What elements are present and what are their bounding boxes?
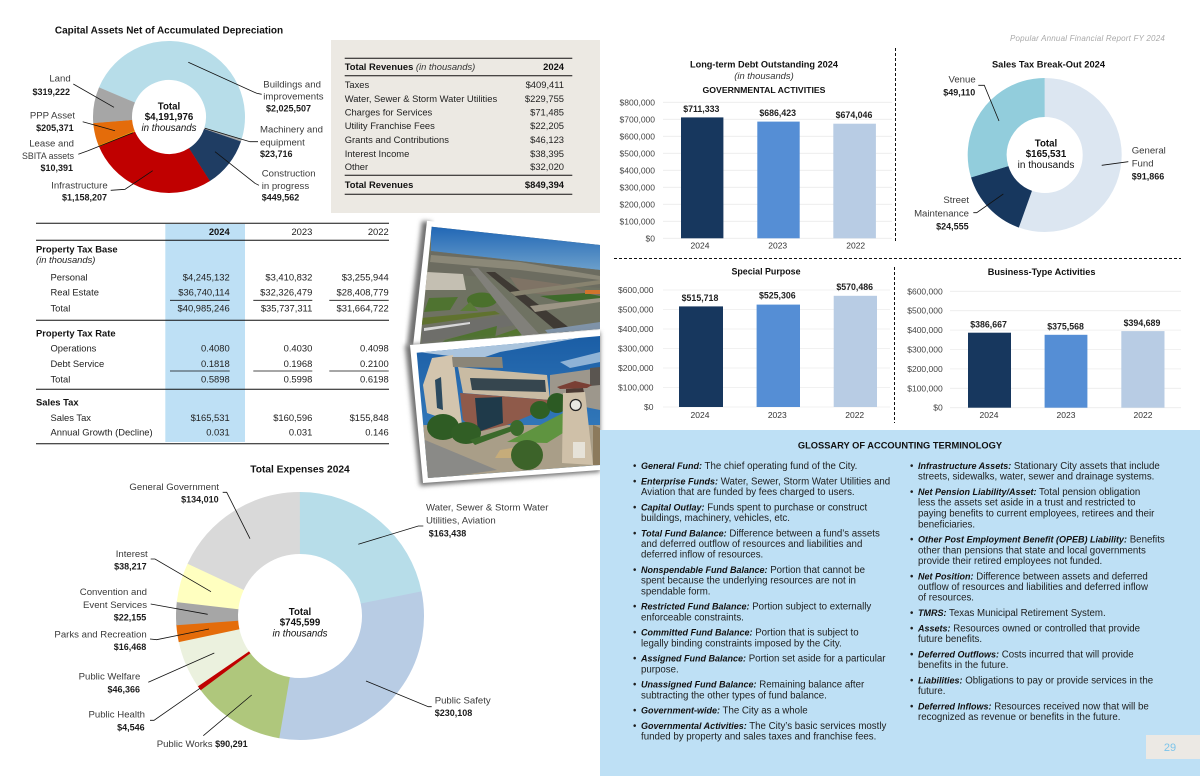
segment labels: $2,025,507	[266, 104, 311, 114]
panel: total revenues table	[331, 40, 600, 213]
bar chart: long-term debt governmental activities: $711,333	[683, 104, 720, 114]
glossary right column: benefits in the future.	[918, 660, 1008, 671]
segment labels: Construction	[262, 168, 316, 179]
bar chart: long-term debt governmental activities: 2024	[691, 240, 710, 250]
header: report title: Popular Annual Financial Report FY 2024	[1010, 34, 1165, 43]
chart heading: Special Purpose	[731, 266, 801, 276]
glossary right column: less the assets set aside in a trust and restricted to	[918, 498, 1136, 509]
glossary right column: Deferred Outflows: Costs incurred that will provide	[918, 649, 1134, 660]
panel: total revenues table: Total Revenues	[345, 179, 413, 190]
donut chart: sales tax break-out	[914, 60, 1166, 231]
panel: glossary of accounting terminology	[600, 430, 1200, 776]
donut centre total: $4,191,976	[145, 112, 194, 123]
glossary right column	[910, 461, 1165, 723]
donut centre total: in thousands	[273, 629, 328, 640]
panel: total revenues table: Total Revenues (in thousands)	[345, 61, 475, 72]
donut centre total: in thousands	[1018, 160, 1074, 171]
segment labels: $4,546	[117, 722, 145, 732]
segment labels: Parks and Recreation	[54, 629, 147, 640]
glossary right column: future.	[918, 686, 945, 697]
panel: property tax and sales tax table: 0.1968	[284, 358, 312, 369]
segment labels: $23,716	[260, 149, 293, 159]
panel: property tax and sales tax table: 0.2100	[360, 358, 389, 369]
segment labels: $205,371	[36, 123, 74, 133]
panel: property tax and sales tax table: $160,596	[273, 412, 312, 423]
glossary left column: Capital Outlay: Funds spent to purchase or construct	[641, 502, 867, 513]
segment labels: Infrastructure	[51, 180, 108, 191]
chart heading: (in thousands)	[734, 70, 794, 81]
glossary left column: Aviation that are funded by fees charged to users.	[641, 487, 855, 498]
panel: total revenues table: Taxes	[345, 79, 370, 90]
photo: aerial view of highways	[407, 221, 605, 347]
panel: total revenues table: Utility Franchise Fees	[345, 120, 435, 131]
segment labels: $24,555	[936, 221, 969, 231]
panel: property tax and sales tax table: Property Tax Base	[36, 244, 118, 254]
segment labels: $134,010	[181, 495, 219, 505]
bar chart: business-type activities: $200,000	[907, 364, 943, 374]
panel: property tax and sales tax table: 2022	[368, 226, 389, 237]
bar chart: long-term debt governmental activities: $800,000	[620, 97, 655, 107]
glossary left column: •	[633, 654, 637, 665]
bar chart: special purpose: $525,306	[759, 291, 796, 301]
segment labels: Interest	[116, 549, 148, 560]
glossary right column: future benefits.	[918, 634, 982, 645]
segment labels	[54, 482, 549, 750]
glossary right column: other than pensions that state and local governments	[918, 545, 1146, 556]
donut centre total: $165,531	[1026, 149, 1067, 160]
segment labels: improvements	[263, 91, 324, 102]
donut centre total: $745,599	[280, 618, 321, 629]
glossary left column: Unassigned Fund Balance: Remaining balance after	[641, 680, 865, 691]
segment labels: $319,222	[32, 87, 70, 97]
segment labels: $22,155	[114, 613, 146, 623]
bar chart: business-type activities: $0	[933, 403, 943, 413]
bar chart: business-type activities: $394,689	[1124, 318, 1160, 328]
glossary right column: streets, sidewalks, water, sewer and drainage systems.	[918, 472, 1154, 483]
panel: property tax and sales tax table: 0.146	[365, 426, 389, 438]
glossary left column: subtracting the other types of fund balance.	[641, 690, 827, 701]
panel: total revenues table: $32,020	[530, 161, 564, 172]
panel: total revenues table: $38,395	[530, 148, 564, 159]
glossary right column: paying benefits to current employees, retirees and their	[918, 508, 1155, 519]
glossary right column: of resources.	[918, 593, 974, 604]
glossary right column: Deferred Inflows: Resources received now that will be	[918, 701, 1149, 712]
glossary left column: Restricted Fund Balance: Portion subject to externally	[641, 602, 871, 613]
glossary left column: •	[633, 461, 637, 472]
bar chart: special purpose: $0	[644, 402, 654, 412]
glossary right column: •	[910, 623, 914, 634]
segment labels: $10,391	[40, 163, 73, 173]
bar chart: long-term debt governmental activities: $674,046	[836, 110, 872, 120]
bar chart: special purpose: $400,000	[618, 324, 654, 334]
panel: property tax and sales tax table: Sales Tax	[50, 412, 91, 423]
bar chart: business-type activities: $400,000	[907, 325, 943, 335]
bar chart: business-type activities: $100,000	[907, 383, 943, 393]
glossary right column: recognized as revenue or benefits in the future.	[918, 712, 1120, 723]
glossary left column: enforceable constraints.	[641, 612, 744, 623]
segment labels: $1,158,207	[62, 192, 107, 202]
segment labels: Maintenance	[914, 208, 969, 219]
segment labels: Public Welfare	[79, 671, 140, 682]
panel: property tax and sales tax table: 0.031	[289, 426, 312, 438]
glossary left column	[633, 461, 890, 743]
panel: total revenues table: Interest Income	[345, 148, 409, 159]
segment labels: Street	[943, 195, 969, 206]
glossary left column: •	[633, 628, 637, 639]
panel: total revenues table: $46,123	[530, 134, 564, 145]
panel: property tax and sales tax table: 2024	[209, 226, 230, 237]
glossary right column: •	[910, 461, 914, 472]
glossary left column: Total Fund Balance: Difference between a fund’s assets	[641, 528, 880, 539]
glossary left column: spendable form.	[641, 586, 710, 597]
glossary left column: Governmental Activities: The City’s basic services mostly	[641, 721, 886, 732]
page number	[1146, 735, 1200, 759]
panel: property tax and sales tax table: $3,255,944	[342, 272, 389, 282]
glossary left column: •	[633, 721, 637, 732]
bar chart: special purpose: $300,000	[618, 344, 654, 354]
panel: property tax and sales tax table: Personal	[50, 272, 88, 282]
segment labels: Public Safety	[435, 695, 491, 706]
heading: sales tax: Sales Tax Break-Out 2024	[992, 60, 1106, 70]
segment labels: Convention and	[80, 587, 147, 598]
panel: total revenues table: Other	[345, 161, 368, 172]
panel: total revenues table: $409,411	[526, 79, 564, 90]
bar chart: special purpose: 2023	[768, 410, 787, 420]
panel: total expenses donut chart	[54, 465, 549, 750]
glossary right column: •	[910, 649, 914, 660]
glossary left column: •	[633, 602, 637, 613]
segment labels: Fund	[1132, 159, 1154, 170]
glossary left column: •	[633, 528, 637, 539]
bar chart: business-type activities: $375,568	[1047, 322, 1084, 332]
panel: property tax and sales tax table: Property Tax Rate	[36, 328, 116, 338]
glossary right column: beneficiaries.	[918, 519, 975, 530]
segment labels: General	[1132, 145, 1166, 156]
donut centre total: in thousands	[142, 123, 197, 134]
glossary right column: Assets: Resources owned or controlled that provide	[917, 623, 1140, 634]
bar chart: long-term debt governmental activities: 2023	[768, 240, 787, 250]
bar chart: business-type activities: 2024	[980, 410, 999, 420]
glossary left column: purpose.	[641, 664, 679, 675]
panel: property tax and sales tax table: $36,740,114	[178, 286, 230, 298]
bar chart: business-type activities: $500,000	[907, 306, 943, 316]
panel: property tax and sales tax table: $155,848	[350, 412, 389, 423]
glossary left column: •	[633, 565, 637, 576]
bar chart: long-term debt governmental activities	[620, 60, 892, 250]
donut centre total	[1018, 139, 1074, 171]
donut centre total: Total	[158, 101, 180, 112]
bar chart: business-type activities: 2022	[1134, 410, 1153, 420]
glossary left column: spent because the underlying resources are not in	[641, 576, 856, 587]
panel: property tax and sales tax table: $165,531	[191, 412, 230, 423]
bar chart: special purpose: $200,000	[618, 363, 654, 373]
segment labels: Land	[49, 74, 71, 85]
glossary left column: Enterprise Funds: Water, Sewer, Storm Water Utilities and	[641, 476, 890, 487]
segment labels: Water, Sewer & Storm Water	[426, 502, 549, 513]
glossary left column: •	[633, 680, 637, 691]
segment labels: in progress	[262, 181, 309, 192]
bar chart: long-term debt governmental activities: $100,000	[620, 216, 655, 226]
bar chart: special purpose: $570,486	[836, 282, 873, 292]
segment labels: Public Health	[88, 710, 145, 721]
glossary right column: •	[910, 701, 914, 712]
bar chart: special purpose: $515,718	[682, 293, 718, 303]
bar chart: business-type activities: $300,000	[907, 344, 943, 354]
panel: property tax and sales tax table: 2023	[291, 226, 312, 237]
donut centre total: Total	[289, 607, 311, 618]
bar chart: long-term debt governmental activities: $400,000	[620, 165, 655, 175]
panel: total revenues table: 2024	[543, 61, 565, 72]
glossary left column: •	[633, 476, 637, 487]
panel: property tax and sales tax table: 0.031	[206, 426, 230, 438]
glossary right column: Infrastructure Assets: Stationary City assets that include	[918, 461, 1160, 472]
glossary left column: Committed Fund Balance: Portion that is subject to	[641, 628, 859, 639]
bar chart: special purpose	[618, 266, 890, 420]
segment labels	[22, 74, 324, 203]
bar chart: long-term debt governmental activities: $700,000	[620, 114, 655, 124]
page number: 29	[1164, 742, 1176, 754]
panel: property tax and sales tax table: $3,410,832	[265, 272, 312, 282]
bar chart: special purpose: 2022	[845, 410, 864, 420]
bar chart: long-term debt governmental activities: 2022	[846, 240, 865, 250]
segment labels: $49,110	[943, 88, 975, 98]
bar chart: long-term debt governmental activities: $300,000	[620, 182, 655, 192]
panel: capital assets donut chart	[22, 26, 324, 203]
donut centre total	[142, 101, 197, 134]
panel: property tax and sales tax table: 0.5998	[284, 374, 312, 384]
segment labels: Venue	[948, 75, 976, 86]
segment labels: Public Works $90,291	[157, 739, 248, 750]
glossary right column: •	[910, 608, 914, 619]
photo: city hall building and clock tower	[405, 330, 605, 486]
segment labels: PPP Asset	[30, 111, 75, 122]
leader lines	[148, 492, 432, 736]
panel: total revenues table: $229,755	[525, 93, 564, 104]
segment labels: $46,366	[107, 684, 140, 694]
heading: total expenses: Total Expenses 2024	[250, 465, 350, 476]
donut centre total	[273, 607, 328, 640]
segment labels: SBITA assets	[22, 151, 74, 162]
panel: total revenues table: $71,485	[530, 106, 564, 118]
segment labels: $230,108	[435, 708, 472, 718]
bar chart: special purpose: $500,000	[618, 304, 654, 314]
chart heading: Long-term Debt Outstanding 2024	[690, 60, 839, 70]
glossary heading: GLOSSARY OF ACCOUNTING TERMINOLOGY	[798, 441, 1003, 451]
glossary right column: outflow of resources and liabilities and deferred inflow	[918, 582, 1149, 593]
panel: property tax and sales tax table: Total	[50, 374, 70, 384]
bar chart: special purpose: $600,000	[618, 285, 654, 295]
panel: property tax and sales tax table: $35,737,311	[261, 302, 312, 314]
glossary right column: •	[910, 535, 914, 546]
segment labels: Lease and	[29, 138, 74, 149]
panel: property tax and sales tax table: $32,326,479	[260, 286, 312, 298]
bar chart: special purpose: 2024	[691, 410, 710, 420]
glossary left column: funded by property and sales taxes and franchise fees.	[641, 732, 876, 743]
segment labels: General Government	[129, 482, 219, 493]
donut: capital assets segments	[91, 39, 247, 195]
glossary left column: •	[633, 502, 637, 513]
heading: capital assets: Capital Assets Net of Accumulated Depreciation	[55, 26, 283, 37]
panel: property tax and sales tax table: Annual Growth (Decline)	[50, 426, 153, 438]
bar chart: long-term debt governmental activities: $0	[646, 233, 655, 243]
glossary left column: legally binding constraints imposed by the City.	[641, 638, 842, 649]
segment labels	[914, 75, 1166, 231]
panel: property tax and sales tax table: $40,985,246	[178, 302, 230, 314]
panel: property tax and sales tax table: Real Estate	[50, 286, 99, 298]
glossary left column: General Fund: The chief operating fund of the City.	[641, 461, 857, 472]
panel: property tax and sales tax table: 0.6198	[360, 374, 389, 384]
panel: property tax and sales tax table: 0.1818	[201, 358, 230, 369]
glossary right column: Net Position: Difference between assets and deferred	[918, 571, 1148, 582]
segment labels: equipment	[260, 137, 305, 148]
panel: total revenues table: Charges for Services	[345, 106, 433, 118]
bar chart: long-term debt governmental activities: $500,000	[620, 148, 655, 158]
bar chart: business-type activities: 2023	[1057, 410, 1076, 420]
panel: total revenues table: $22,205	[530, 120, 564, 131]
segment labels: Event Services	[83, 600, 147, 611]
segment labels: Buildings and	[263, 79, 321, 90]
chart heading: Business-Type Activities	[988, 267, 1095, 277]
glossary left column: •	[633, 706, 637, 717]
bar chart: special purpose: $100,000	[618, 382, 654, 392]
segment labels: Utilities, Aviation	[426, 516, 496, 527]
bar chart: business-type activities: $386,667	[970, 319, 1007, 329]
panel: total revenues table: Water, Sewer & Storm Water Utilities	[345, 93, 497, 104]
glossary right column: TMRS: Texas Municipal Retirement System.	[918, 608, 1106, 619]
glossary left column: deferred inflow of resources.	[641, 550, 763, 561]
donut centre total: Total	[1035, 139, 1057, 150]
chart heading: GOVERNMENTAL ACTIVITIES	[703, 85, 826, 95]
panel: property tax and sales tax table: $28,408,779	[337, 286, 389, 298]
segment labels: $91,866	[1132, 171, 1164, 181]
panel: property tax and sales tax table: $31,664,722	[337, 302, 389, 314]
bar chart: long-term debt governmental activities: $600,000	[620, 131, 655, 141]
chart heading	[690, 60, 839, 95]
panel: total revenues table: $849,394	[525, 179, 565, 190]
panel: property tax and sales tax table: $4,245,132	[183, 272, 230, 282]
segment labels: $449,562	[262, 193, 299, 203]
donut: sales tax segments	[971, 81, 1118, 229]
leader lines	[973, 85, 1128, 213]
glossary left column: and deferred outflow of resources and liabilities and	[641, 539, 862, 550]
glossary right column: Net Pension Liability/Asset: Total pension obligation	[918, 487, 1140, 498]
panel: property tax and sales tax table: 0.5898	[201, 374, 230, 384]
panel: property tax and sales tax table: 0.4080	[201, 342, 230, 354]
panel: total revenues table: Grants and Contributions	[345, 134, 449, 145]
glossary right column: •	[910, 571, 914, 582]
glossary left column: Assigned Fund Balance: Portion set aside for a particular	[640, 654, 886, 665]
bar chart: long-term debt governmental activities: $200,000	[620, 199, 655, 209]
segment labels: $16,468	[114, 642, 146, 652]
glossary right column: •	[910, 487, 914, 498]
glossary right column: •	[910, 675, 914, 686]
segment labels: $163,438	[429, 529, 466, 539]
glossary right column: provide their retired employees not funded.	[918, 556, 1102, 567]
bar chart: business-type activities	[907, 267, 1181, 420]
panel: property tax and sales tax table: Total	[50, 302, 70, 314]
glossary left column: Nonspendable Fund Balance: Portion that cannot be	[641, 565, 865, 576]
donut: expenses segments	[170, 486, 430, 746]
segment labels: $38,217	[114, 562, 147, 572]
segment labels: Machinery and	[260, 125, 323, 136]
panel: property tax and sales tax table: (in thousands)	[36, 254, 95, 265]
bar chart: long-term debt governmental activities: $686,423	[759, 108, 796, 118]
panel: property tax and sales tax table: 0.4098	[360, 342, 389, 354]
glossary left column: Government-wide: The City as a whole	[641, 706, 808, 717]
panel: property tax and sales tax table: 0.4030	[284, 342, 312, 354]
glossary right column: Liabilities: Obligations to pay or provide services in the	[918, 675, 1153, 686]
glossary left column: buildings, machinery, vehicles, etc.	[641, 513, 790, 524]
panel: property tax and sales tax table	[36, 223, 389, 444]
panel: property tax and sales tax table: Sales Tax	[36, 396, 79, 408]
bar chart: business-type activities: $600,000	[907, 286, 943, 296]
glossary right column: Other Post Employment Benefit (OPEB) Liability: Benefits	[918, 535, 1165, 546]
divider lines between charts	[614, 48, 1181, 423]
panel: property tax and sales tax table: Debt Service	[50, 358, 104, 369]
panel: property tax and sales tax table: Operations	[50, 342, 97, 354]
leader lines	[73, 62, 262, 190]
